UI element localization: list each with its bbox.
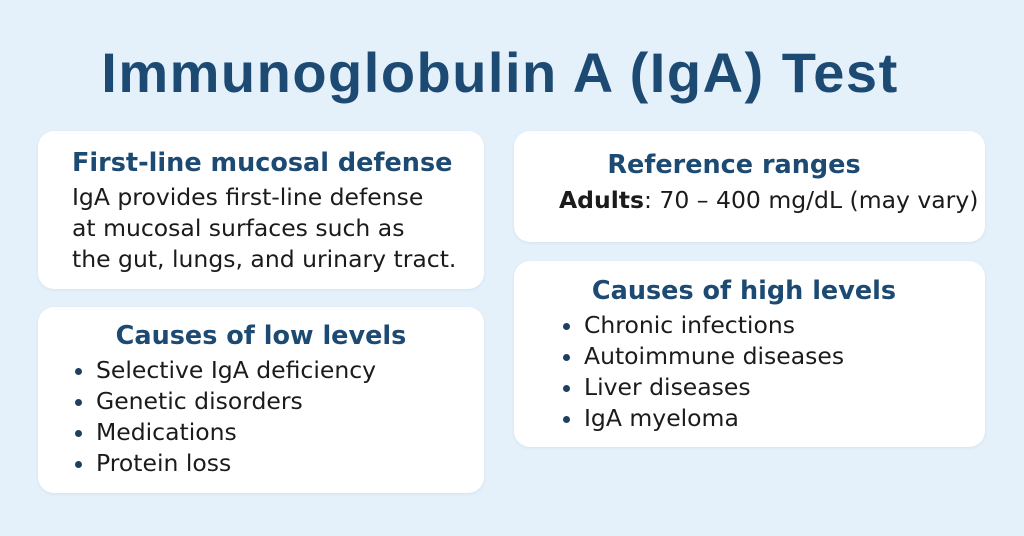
heading: high: Causes of high levels (592, 276, 896, 306)
list: low causes: Protein loss (96, 449, 231, 477)
panel: reference ranges (514, 131, 985, 242)
list: high causes: Chronic infections (584, 311, 795, 339)
list: low causes: Genetic disorders (96, 387, 303, 415)
list: high causes (563, 311, 844, 432)
list: low causes: Selective IgA deficiency (96, 356, 376, 384)
text block: description: the gut, lungs, and urinary tract. (72, 245, 456, 273)
heading: first-line: First-line mucosal defense (72, 148, 452, 178)
list: low causes: Medications (96, 418, 237, 446)
text block: description: at mucosal surfaces such as (72, 214, 404, 242)
list: high causes: IgA myeloma (584, 404, 739, 432)
text block: description: IgA provides first-line defense (72, 183, 423, 211)
panel: causes of high levels (514, 261, 985, 447)
panel: first-line mucosal defense (38, 131, 484, 289)
list: high causes: Autoimmune diseases (584, 342, 844, 370)
panel: causes of low levels (38, 307, 484, 493)
list: low causes (75, 356, 376, 477)
text block: description (72, 183, 456, 273)
heading: reference: Reference ranges (607, 150, 861, 180)
heading: low: Causes of low levels (116, 321, 406, 351)
title: Immunoglobulin A (IgA) Test (101, 41, 899, 104)
list: high causes: Liver diseases (584, 373, 751, 401)
text block: adults: Adults: 70 – 400 mg/dL (may vary) (559, 186, 978, 214)
